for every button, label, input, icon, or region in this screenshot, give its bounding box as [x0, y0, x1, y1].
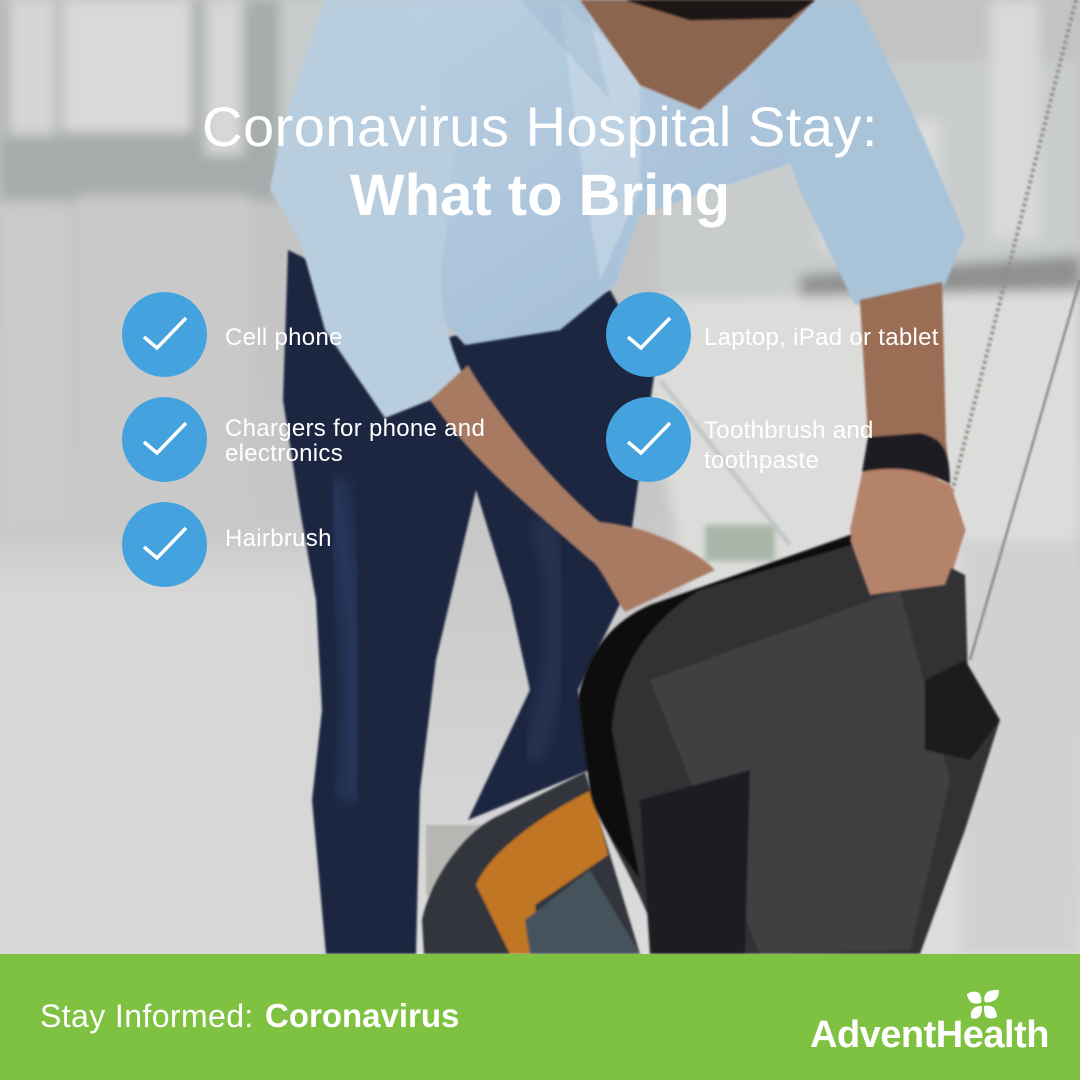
ropes	[660, 0, 1080, 660]
icon: four-petal flower	[967, 990, 999, 1019]
grey step	[426, 825, 486, 895]
legs	[283, 250, 655, 954]
checklist item: hairbrush	[122, 502, 332, 587]
label: toothpaste	[704, 447, 819, 474]
wordmark: AdventHealth	[810, 1014, 1049, 1056]
icon: check	[606, 397, 691, 482]
label	[225, 415, 485, 467]
checklist item: chargers	[122, 397, 485, 482]
footer text: Stay Informed: Coronavirus	[40, 997, 459, 1034]
title line 2: What to Bring	[350, 163, 730, 228]
checklist item: toothbrush	[606, 397, 874, 482]
open bag with orange lining	[422, 772, 640, 954]
icon: check	[122, 292, 207, 377]
backpack	[578, 535, 1000, 954]
icon: check	[122, 397, 207, 482]
logo: AdventHealth	[810, 990, 1049, 1056]
checklist item: laptop	[606, 292, 939, 377]
icon: check	[606, 292, 691, 377]
label: electronics	[225, 440, 343, 467]
label: Chargers for phone and	[225, 415, 485, 442]
label: Cell phone	[225, 324, 343, 351]
shirt body	[270, 0, 965, 418]
icon: check	[122, 502, 207, 587]
label	[704, 417, 874, 474]
label: Hairbrush	[225, 525, 332, 552]
title line 1: Coronavirus Hospital Stay:	[202, 95, 878, 158]
checklist item: cell phone	[122, 292, 343, 377]
footer band	[0, 954, 1080, 1080]
head	[580, 0, 815, 110]
label: Toothbrush and	[704, 417, 874, 444]
arms	[430, 282, 965, 612]
label: Laptop, iPad or tablet	[704, 324, 939, 351]
